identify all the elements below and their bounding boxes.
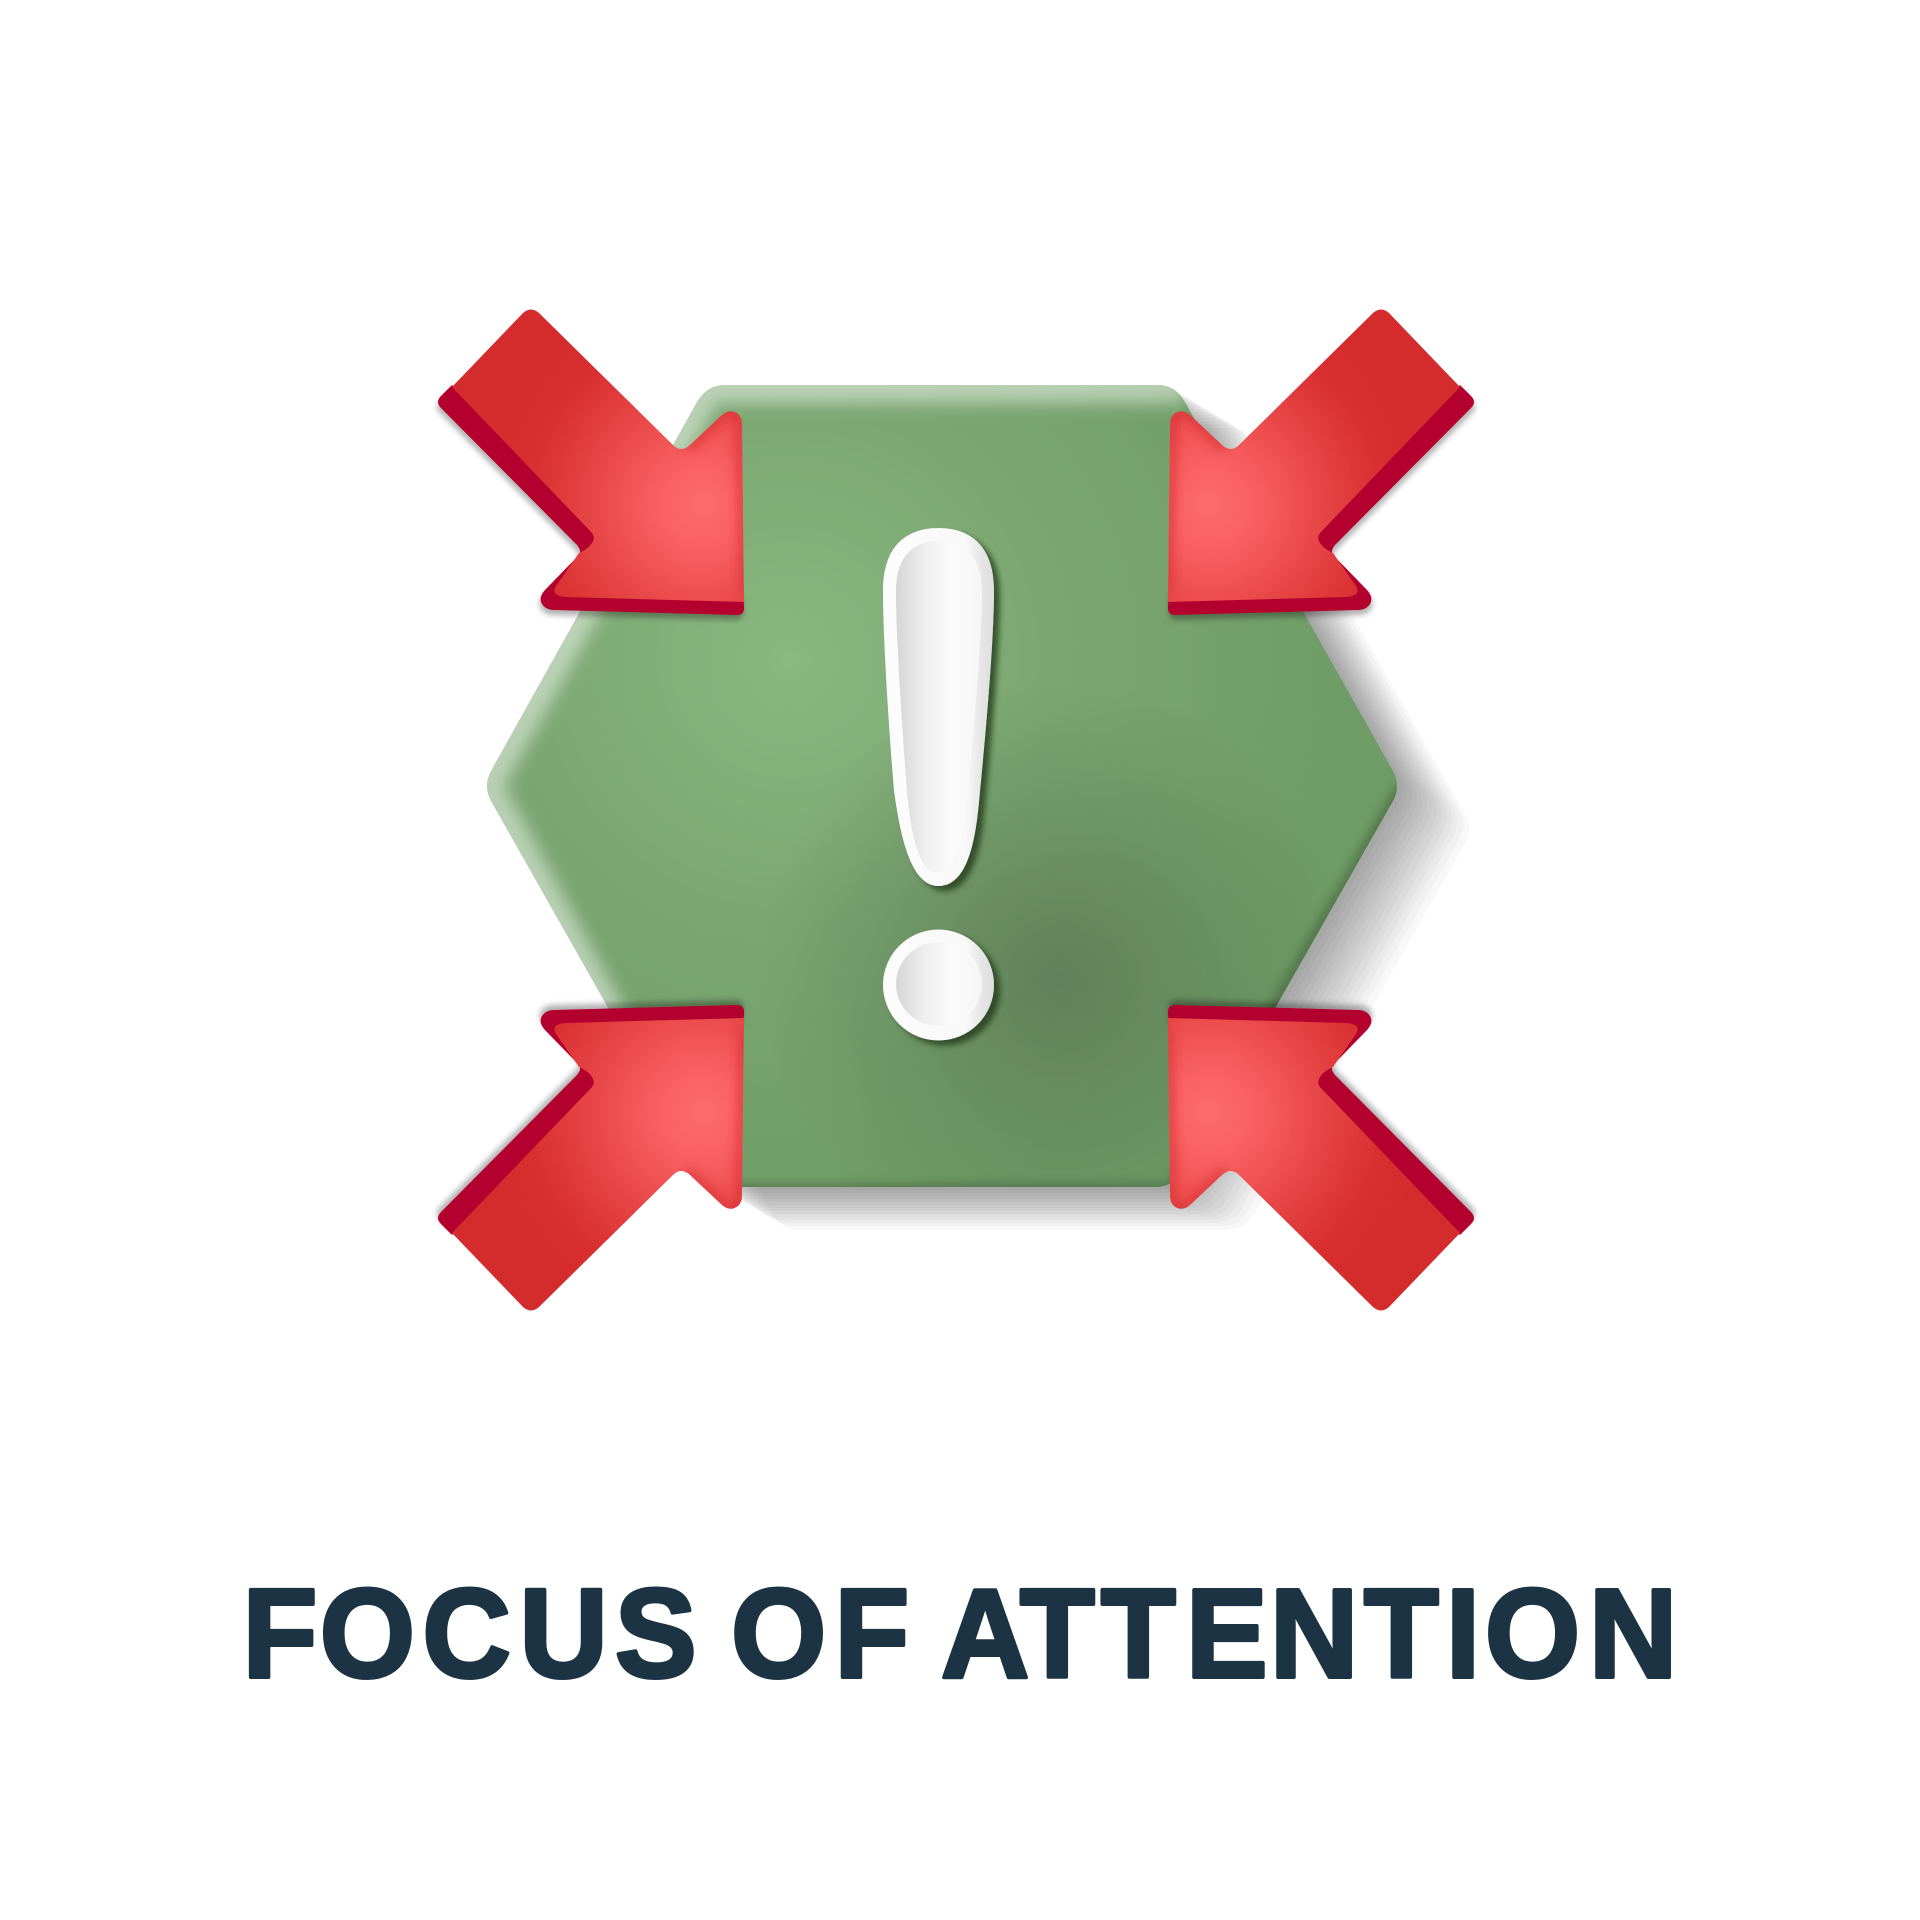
arrow: top left	[438, 310, 744, 615]
arrow: top right	[1168, 310, 1474, 615]
hexagon cast shadow	[492, 388, 1469, 1230]
icon: exclamation mark	[883, 528, 994, 1040]
green hexagon panel	[477, 379, 1402, 1190]
arrow: bottom right	[1168, 1005, 1474, 1310]
exclamation bar	[883, 528, 994, 886]
arrow: bottom left	[438, 1005, 744, 1310]
title: FOCUS OF ATTENTION	[243, 1564, 1677, 1704]
exclamation dot	[883, 930, 994, 1040]
